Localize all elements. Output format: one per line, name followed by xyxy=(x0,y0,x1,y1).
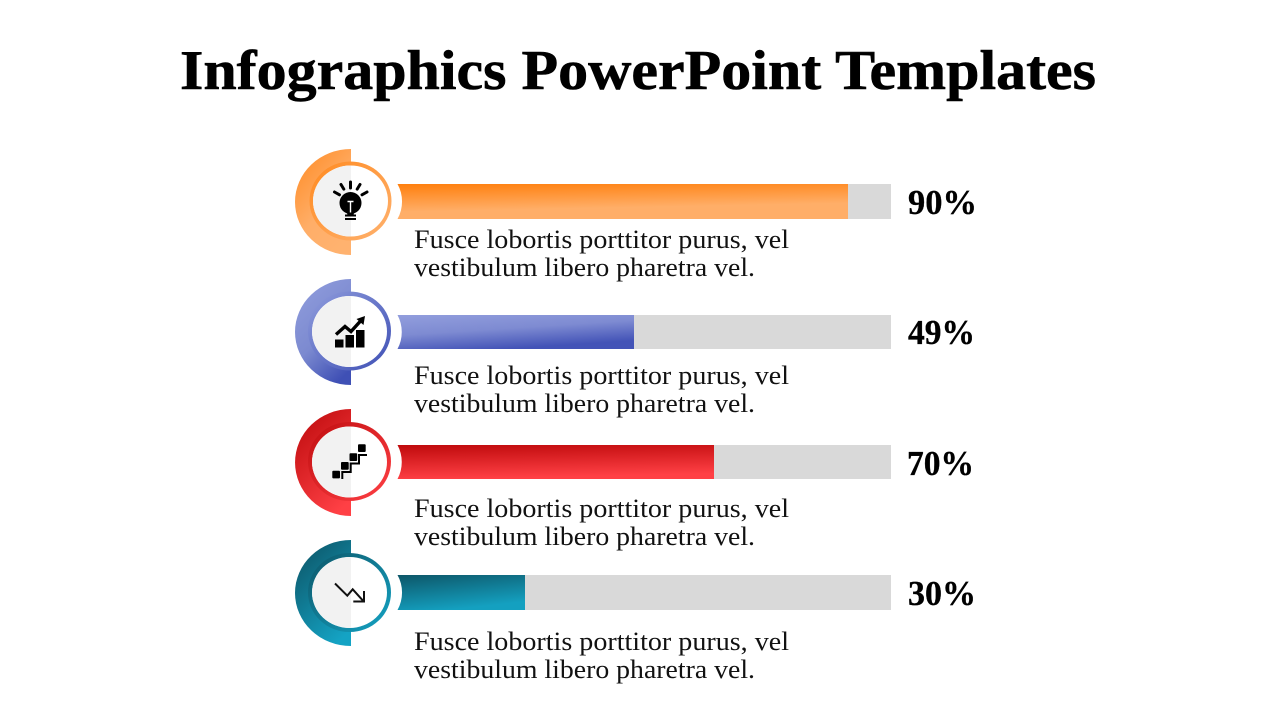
progress bar track xyxy=(630,315,891,349)
percentage: 49% xyxy=(908,313,975,352)
icon: lightbulb xyxy=(334,182,367,219)
description: Fusce lobortis porttitor purus, vel xyxy=(414,224,789,254)
description: vestibulum libero pharetra vel. xyxy=(414,252,755,282)
description: vestibulum libero pharetra vel. xyxy=(414,521,755,551)
description xyxy=(414,360,789,418)
icon: growth chart xyxy=(335,316,365,348)
description xyxy=(414,224,789,282)
progress bar fill xyxy=(398,575,525,610)
progress bar track xyxy=(520,575,891,610)
icon badge: teal downward trend xyxy=(295,540,391,646)
progress bar fill xyxy=(398,184,848,219)
icon: stairs xyxy=(332,444,367,479)
panel: row 3, 70% xyxy=(295,409,974,551)
description: Fusce lobortis porttitor purus, vel xyxy=(414,626,789,656)
description: vestibulum libero pharetra vel. xyxy=(414,654,755,684)
panel: row 1, 90% xyxy=(295,149,977,282)
percentage: 70% xyxy=(907,444,974,483)
panel: row 4, 30% xyxy=(295,540,976,684)
progress bar fill xyxy=(398,445,714,479)
percentage: 90% xyxy=(908,183,977,222)
description xyxy=(414,626,789,684)
description: vestibulum libero pharetra vel. xyxy=(414,388,755,418)
panel: row 2, 49% xyxy=(295,279,975,418)
icon: downward trend arrow xyxy=(335,584,364,602)
icon badge: orange lightbulb xyxy=(295,149,392,255)
description xyxy=(414,493,789,551)
description: Fusce lobortis porttitor purus, vel xyxy=(414,360,789,390)
icon badge: red stairs xyxy=(295,409,391,516)
progress bar track xyxy=(710,445,891,479)
progress bar fill xyxy=(398,315,634,349)
icon badge: blue growth chart xyxy=(295,279,391,385)
title: Infographics PowerPoint Templates xyxy=(180,40,1096,102)
progress bar track xyxy=(840,184,891,219)
description: Fusce lobortis porttitor purus, vel xyxy=(414,493,789,523)
percentage: 30% xyxy=(908,574,976,613)
